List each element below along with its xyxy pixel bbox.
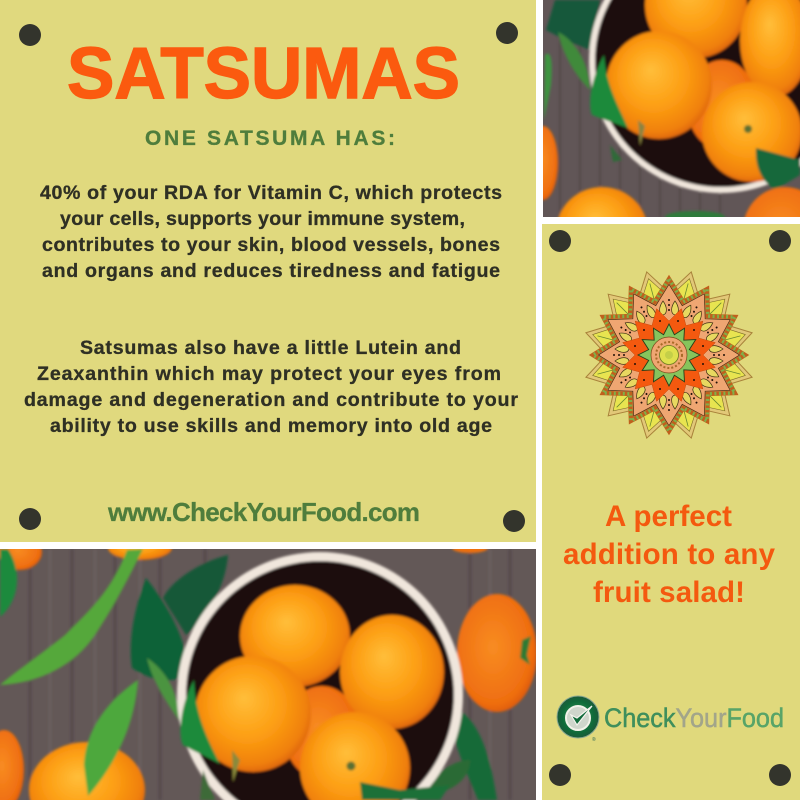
callout: fruit salad	[563, 500, 776, 609]
panel: main text background	[0, 0, 536, 542]
text block: lutein and zeaxanthin: damage and degeneration and contribute to your	[24, 389, 518, 411]
photo: satsumas in bowl, bottom left	[0, 534, 537, 800]
callout: fruit salad: fruit salad!	[593, 576, 745, 609]
text block: vitamin C: 40% of your RDA for Vitamin C, which protects	[40, 182, 502, 204]
callout: fruit salad: addition to any	[563, 538, 776, 571]
panel: side background	[542, 224, 800, 800]
text block: vitamin C: and organs and reduces tiredness and fatigue	[42, 260, 500, 282]
callout: fruit salad: A perfect	[605, 500, 732, 533]
text block: lutein and zeaxanthin: Satsumas also have a little Lutein and	[80, 337, 461, 359]
website link: www.CheckYourFood.com	[107, 497, 420, 527]
subheading: ONE SATSUMA HAS:	[145, 127, 395, 150]
text block: lutein and zeaxanthin: Zeaxanthin which may protect your eyes from	[37, 363, 501, 385]
logo: Check Your Food	[557, 696, 784, 743]
logo: Check Your Food: ®	[592, 736, 596, 743]
title: SATSUMAS	[67, 34, 460, 114]
photo: satsumas in bowl, top right	[543, 0, 800, 217]
text block: vitamin C	[40, 182, 502, 282]
text block: vitamin C: your cells, supports your immune system,	[60, 208, 465, 230]
text block: vitamin C: contributes to your skin, blood vessels, bones	[42, 234, 500, 256]
text block: lutein and zeaxanthin: ability to use skills and memory into old age	[50, 415, 492, 437]
mandala icon	[575, 261, 763, 449]
text block: lutein and zeaxanthin	[24, 337, 518, 437]
logo: Check Your Food: CheckYourFood	[604, 703, 784, 733]
